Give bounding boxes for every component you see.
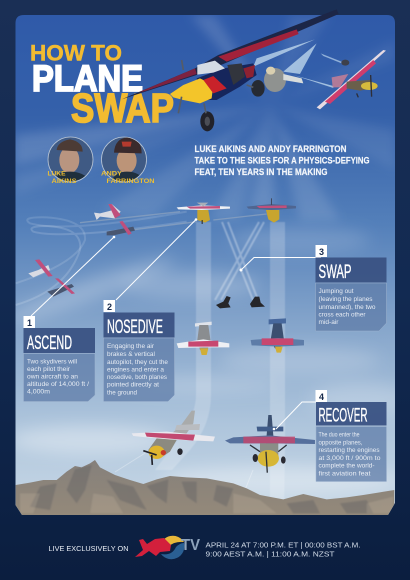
step 4 body: opposite planes, xyxy=(318,440,363,446)
subtitle xyxy=(194,144,370,178)
subtitle: LUKE AIKINS AND ANDY FARRINGTON xyxy=(194,144,347,155)
step 2 body: pointed directly at xyxy=(107,382,159,388)
step 1 body: each pilot their xyxy=(27,367,70,373)
footer: broadcast times: APRIL 24 AT 7:00 P.M. ET | 00:00 BST A.M. xyxy=(206,540,360,550)
vertical smoke trails xyxy=(155,222,285,512)
step 4 body: first aviation feat xyxy=(318,472,371,478)
title line: how to: HOW TO xyxy=(30,40,122,66)
step 4 body: at 3,000 ft / 900m to xyxy=(318,456,381,462)
main red bull plane with skydiver xyxy=(122,9,339,131)
icon: red bull tv logo xyxy=(135,536,200,559)
title xyxy=(30,40,174,131)
footer: broadcast times: 9:00 AEST A.M. | 11:00 A.M. NZST xyxy=(206,550,335,558)
ascending planes, lower pair xyxy=(28,259,75,297)
footer: live exclusively on: LIVE EXCLUSIVELY ON xyxy=(48,544,128,553)
horizontal flight planes and trails, mid section xyxy=(28,198,304,355)
panel: step 3 swap xyxy=(316,245,386,331)
subtitle: FEAT, TEN YEARS IN THE MAKING xyxy=(194,167,328,178)
loop trails xyxy=(16,212,187,305)
step 3 body: mid-air xyxy=(318,320,338,326)
crossing skydiver trails xyxy=(215,222,264,300)
subtitle: TAKE TO THE SKIES FOR A PHYSICS-DEFYING xyxy=(194,156,370,166)
skydiver xyxy=(264,67,303,92)
title line: swap: SWAP xyxy=(71,85,174,131)
mountains xyxy=(16,460,394,516)
panel: step 4 recover xyxy=(316,390,386,482)
connector dots xyxy=(113,218,275,430)
step 2 body: engines and enter a xyxy=(107,368,165,374)
flight trails xyxy=(80,212,267,233)
step 3 body: unmanned), the two xyxy=(318,305,376,311)
diving planes xyxy=(177,322,229,355)
ascending planes, upper pair xyxy=(94,204,135,235)
skydivers mid-air xyxy=(216,296,265,308)
step 3 body: Jumping out xyxy=(318,289,354,295)
panel: step 1 ascend xyxy=(24,316,95,402)
wing xyxy=(122,9,339,99)
step number 1: 1 xyxy=(27,318,32,328)
step 3 body: cross each other xyxy=(318,312,366,318)
step 4 heading: RECOVER xyxy=(318,406,368,426)
icon: red bull tv logo: TV xyxy=(181,537,200,554)
step 3 body: (leaving the planes xyxy=(318,297,372,303)
jump streaks xyxy=(253,39,333,88)
fuselage xyxy=(197,63,257,100)
step 1 body: altitude of 14,000 ft / xyxy=(27,382,89,388)
step 2 body: nosedive, both planes xyxy=(107,375,167,381)
step 4 body: restarting the engines xyxy=(318,448,380,454)
step 1 body: own aircraft to an xyxy=(27,374,78,380)
step number 3: 3 xyxy=(319,247,324,257)
portrait: Andy Farrington xyxy=(102,137,146,187)
portrait labels: ANDY xyxy=(101,170,123,178)
step 2 body: Engaging the air xyxy=(107,344,154,350)
step 2 heading: NOSEDIVE xyxy=(107,317,163,338)
step 1 body: Two skydivers will xyxy=(27,360,77,366)
level planes at top xyxy=(177,203,230,224)
sky rays and clouds xyxy=(15,15,395,220)
title line: plane: PLANE xyxy=(32,58,143,99)
portrait: Luke Aikins xyxy=(48,137,93,187)
portrait labels xyxy=(48,170,155,185)
step number 4: 4 xyxy=(319,392,324,402)
step 2 body: brakes & vertical xyxy=(107,352,155,358)
step 2 body: autopilot, they cut the xyxy=(107,360,169,366)
connector lines xyxy=(31,220,321,429)
recovering plane right xyxy=(225,415,315,473)
step 4 body: complete the world- xyxy=(318,464,374,470)
step 1 heading: ASCEND xyxy=(27,333,72,354)
footer: broadcast times xyxy=(206,540,360,558)
step 4 body: The duo enter the xyxy=(318,432,360,438)
landing gear xyxy=(200,111,214,131)
portrait labels: LUKE xyxy=(48,170,66,178)
step number 2: 2 xyxy=(107,302,112,312)
portrait labels: FARRINGTON xyxy=(106,178,155,185)
step 1 body xyxy=(24,354,95,402)
panel: step 2 nosedive xyxy=(104,300,174,402)
step 3 heading: SWAP xyxy=(318,262,352,283)
step 2 body: the ground xyxy=(107,390,137,396)
step 2 body xyxy=(104,338,174,402)
step 4 body xyxy=(316,426,386,482)
recover planes xyxy=(132,411,315,473)
step 3 body xyxy=(316,283,386,331)
recovering plane left xyxy=(132,411,215,465)
portrait labels: AIKINS xyxy=(52,178,77,185)
step 1 body: 4,000m xyxy=(27,390,50,396)
small plane upper right xyxy=(317,50,386,109)
